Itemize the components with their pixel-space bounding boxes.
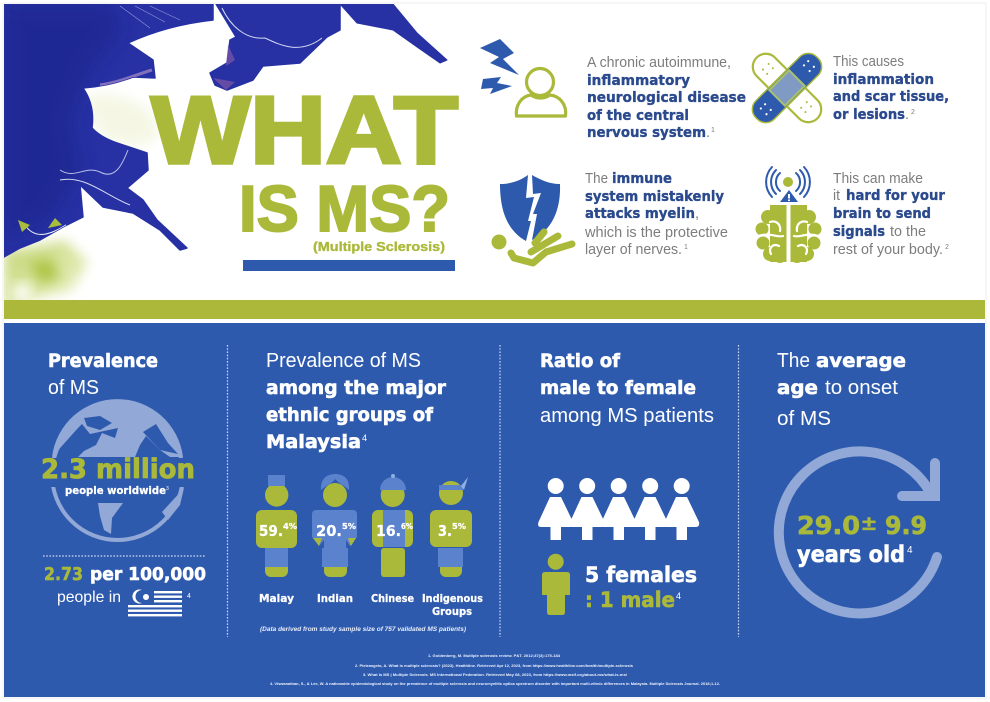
icon: globe [52, 399, 184, 540]
ink splash artwork [4, 4, 447, 312]
figure: Indian: 5% [342, 522, 356, 531]
panel: statistics [4, 323, 985, 697]
text block: inflammation: This causes [833, 54, 904, 70]
heading: ethnic groups: ethnic groups of [266, 404, 434, 426]
text block: immune system: 1 [684, 244, 688, 251]
icon: Malaysian flag [128, 590, 191, 616]
stat: average age: 4 [907, 545, 913, 556]
figure: Indigenous [430, 477, 472, 577]
icon: Malaysian flag: 4 [187, 593, 191, 600]
text block: inflammation: 2 [911, 109, 915, 116]
figure: Malay [256, 475, 297, 577]
text block: inflammation: or lesions [833, 107, 905, 123]
figure: Malay: 4% [283, 522, 297, 531]
heading: ratio: among MS patients [540, 405, 714, 427]
data note: (Data derived from study sample size of 757 validated MS patients) [260, 626, 466, 633]
heading: prevalence: of MS [48, 377, 99, 399]
references [270, 654, 720, 686]
ethnic group labels: Indian [317, 593, 353, 605]
stat: average age: 29.0 [797, 511, 860, 540]
text block: chronic autoimmune: of the central [587, 108, 689, 124]
icon: crossed bandages [747, 48, 827, 128]
figure: Indigenous: 3. [438, 522, 452, 540]
text block: brain signals: rest of your body. [833, 242, 943, 258]
text block: brain signals: signals [833, 224, 885, 240]
text block: chronic autoimmune: neurological disease [587, 90, 746, 106]
title: WHAT IS MS?: IS MS? [239, 172, 450, 245]
text block: immune system: , [695, 206, 699, 222]
figure: Indian [312, 474, 357, 577]
stat: 2.3 million: 2.3 million [41, 454, 195, 485]
figure: Chinese: 6% [401, 522, 413, 531]
heading: ratio [540, 350, 714, 427]
heading: average age: to onset [825, 377, 898, 399]
text block: brain signals: 2 [945, 244, 949, 251]
text block: brain signals [833, 171, 949, 258]
heading: ratio: Ratio of [540, 350, 621, 372]
text block: immune system: immune [612, 171, 672, 187]
heading: average age: average [816, 350, 906, 372]
title: WHAT IS MS?: WHAT [151, 77, 458, 184]
references: 3. What is MS | Multiple Sclerosis. MS International Federation. Retrieved May 08, 2023, from https://www.msif.org/about-ms/what-is-ms/ [363, 673, 628, 677]
text block: immune system: The [585, 171, 608, 187]
title underline bar [243, 260, 455, 271]
stat: 2.73 per 100,000: per 100,000 [90, 564, 206, 585]
text block: brain signals: hard for your [846, 188, 945, 204]
icon: brain with warning signal [756, 167, 822, 263]
stat: average age: years old [797, 542, 905, 568]
text block: immune system [584, 171, 728, 258]
heading: prevalence: Prevalence [48, 350, 158, 372]
stat: average age [797, 511, 927, 568]
ethnic group labels [259, 593, 483, 618]
heading: ethnic groups: Malaysia [266, 431, 361, 453]
ethnic group labels: Malay [259, 593, 294, 605]
green divider band [4, 300, 985, 319]
stat: average age: ± [862, 513, 876, 535]
figure: Indian: 20. [316, 522, 342, 540]
text block: inflammation: inflammation [833, 72, 934, 88]
text block: brain signals: it [833, 188, 840, 204]
title: WHAT IS MS? [151, 77, 458, 254]
text block: chronic autoimmune: A chronic autoimmune, [587, 55, 731, 71]
icon: person with lightning [480, 39, 566, 116]
text block: chronic autoimmune: . [706, 125, 710, 141]
text block: inflammation [833, 54, 949, 123]
stat: 5 females : 1 male: 4 [676, 591, 681, 601]
text block: chronic autoimmune: inflammatory [587, 73, 690, 89]
heading: ratio: male to female [540, 377, 696, 399]
text block: brain signals: This can make [833, 171, 923, 187]
stat: 2.3 million: people worldwide [65, 485, 166, 497]
stat: 2.73 per 100,000: people in [57, 589, 121, 606]
heading: prevalence [48, 350, 158, 399]
stat: 5 females : 1 male: : 1 male [585, 588, 675, 612]
icon: circular arrow [779, 451, 937, 613]
ethnic group labels: Groups [432, 606, 472, 618]
heading: average age: age [777, 377, 818, 399]
icon: one male [542, 554, 570, 615]
heading: ethnic groups: among the major [266, 377, 447, 399]
subtitle: (Multiple Sclerosis) [313, 239, 445, 254]
text block: immune system: layer of nerves. [585, 242, 682, 258]
text block: immune system: attacks myelin [585, 206, 695, 222]
stat: average age: 9.9 [885, 511, 927, 540]
references: 2. Pietrangelo, A. What is multiple sclerosis? (2023). Healthline. Retrieved Apr 12, 2023, from https://www.healthline.com/health/multiple-sclerosis [355, 664, 633, 668]
heading: ethnic groups: Prevalence of MS [266, 350, 421, 372]
references: 1. Goldenberg, M. Multiple sclerosis review. P&T. 2012;37(3):175-184 [428, 654, 561, 658]
text block: chronic autoimmune: 1 [711, 127, 715, 134]
figure: Chinese: 16. [376, 522, 401, 540]
ethnic group labels: Chinese [371, 593, 414, 605]
figure: Indigenous: 5% [452, 522, 466, 531]
text block: chronic autoimmune: nervous system [587, 125, 706, 141]
text block: brain signals: to the [890, 224, 926, 240]
figure: Malay: 59. [259, 522, 283, 540]
heading: average age [777, 350, 906, 430]
text block: chronic autoimmune [587, 55, 746, 141]
text block: brain signals: brain to send [833, 206, 931, 222]
text block: immune system: which is the protective [584, 225, 728, 241]
stat: 5 females : 1 male [585, 563, 697, 612]
heading: ethnic groups [266, 350, 447, 453]
ethnic group labels: Indigenous [422, 593, 483, 605]
heading: average age: The [777, 350, 810, 372]
stat: 5 females : 1 male: 5 females [585, 563, 697, 587]
heading: ethnic groups: 4 [362, 433, 367, 443]
stat: 2.73 per 100,000 [44, 564, 206, 606]
stat: 2.3 million: 3 [166, 486, 169, 492]
references: 4. Viswanathan, S., & Lee, W. A nationwide epidemiological study on the prevalence of multiple sclerosis and neuromyelitis optica spectrum disorder with important multi-ethnic differences in Malaysia. Multiple Sclerosis Journal. 2018;1-12. [270, 682, 720, 686]
heading: average age: of MS [777, 408, 831, 430]
figure: Chinese [372, 474, 413, 577]
stat: 2.73 per 100,000: 2.73 [44, 564, 83, 585]
text block: immune system: system mistakenly [585, 189, 724, 205]
text block: inflammation: and scar tissue, [833, 89, 949, 105]
icon: five females [538, 478, 699, 540]
icon: shield with lightning and hand [492, 175, 572, 263]
text block: inflammation: . [905, 107, 909, 123]
